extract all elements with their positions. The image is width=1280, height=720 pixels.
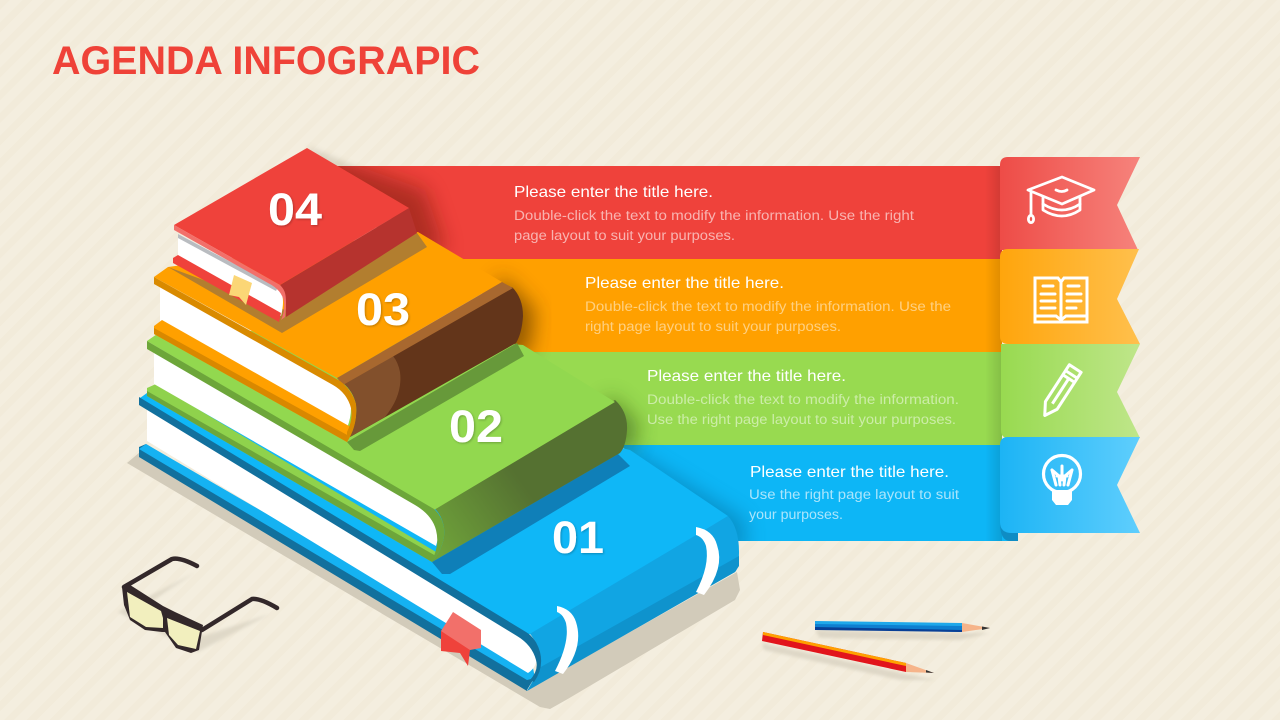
text block: green — [647, 368, 959, 427]
band: green — [520, 352, 1002, 445]
pages — [154, 353, 438, 546]
top cover — [174, 148, 409, 285]
spine ridge — [337, 282, 513, 385]
number 02: 02 — [449, 401, 503, 452]
pages — [160, 287, 351, 428]
icon: graduation cap — [1028, 177, 1094, 223]
cover edge — [139, 397, 541, 682]
text block: blue: Use the right page layout to suit — [749, 487, 959, 502]
glasses shadow — [118, 572, 270, 652]
icon: pencil — [1039, 365, 1081, 419]
text block: orange: Please enter the title here. — [585, 275, 784, 292]
number 03: 03 — [356, 284, 410, 335]
number 01: 01 — [552, 512, 604, 563]
lower cover — [154, 320, 352, 442]
cover edge — [154, 277, 356, 442]
text block: orange: right page layout to suit your purposes. — [585, 319, 841, 334]
shadow from orange book — [347, 343, 524, 451]
number labels — [268, 184, 604, 563]
lenses — [127, 592, 163, 628]
spine — [432, 400, 627, 562]
bookmark — [441, 612, 481, 666]
icon: open book — [1035, 278, 1087, 322]
lower cover — [173, 255, 281, 322]
band: red — [335, 166, 1002, 259]
cover edge — [174, 225, 286, 320]
top cover — [147, 330, 615, 510]
spine — [343, 287, 523, 437]
pages — [147, 410, 536, 673]
text block: red — [514, 184, 914, 243]
cover edge — [147, 341, 444, 562]
title: AGENDA INFOGRAPIC — [52, 39, 480, 83]
text block: blue: Please enter the title here. — [750, 464, 949, 481]
red book — [173, 148, 417, 322]
orange book — [154, 232, 523, 442]
band: orange — [460, 259, 1002, 352]
tab: orange — [1000, 249, 1140, 344]
glasses — [118, 559, 277, 653]
text block: green: Please enter the title here. — [647, 368, 846, 385]
icon: light bulb — [1044, 456, 1080, 505]
text block: blue: your purposes. — [749, 507, 843, 522]
band: blue — [620, 445, 1018, 541]
spine — [280, 208, 417, 317]
shadow from red book — [168, 233, 427, 333]
text block: red: Double-click the text to modify the information. Use the right — [514, 208, 914, 223]
text block: green: Double-click the text to modify the information. — [647, 392, 959, 407]
text block: orange — [585, 275, 951, 334]
text block: red: Please enter the title here. — [514, 184, 713, 201]
lower cover — [147, 384, 436, 562]
lower cover — [139, 444, 533, 691]
text block: blue — [749, 464, 959, 522]
pencil: red — [762, 632, 936, 680]
tab: blue — [1000, 437, 1140, 533]
spine bands — [555, 606, 578, 674]
green book — [147, 330, 627, 562]
fold under blue tab — [1000, 522, 1018, 541]
ribbon bands — [335, 166, 1018, 541]
shadows cast on bands — [280, 148, 1002, 560]
ground shadow of book stack — [127, 146, 740, 709]
top cover — [154, 232, 502, 378]
top cover — [140, 393, 728, 635]
pencil: blue — [815, 621, 990, 640]
tab: green — [1001, 344, 1140, 438]
shadow from green book — [432, 454, 630, 574]
text block: green: Use the right page layout to suit your purposes. — [647, 412, 956, 427]
bookmark — [229, 275, 252, 305]
text block: orange: Double-click the text to modify the information. Use the — [585, 299, 951, 314]
text block: red: page layout to suit your purposes. — [514, 228, 735, 243]
number 04: 04 — [268, 184, 322, 235]
ribbon tabs — [1000, 157, 1140, 541]
blue book — [139, 393, 739, 691]
frame — [122, 559, 277, 653]
spine — [527, 516, 739, 691]
pages — [178, 234, 283, 316]
tab: red — [1000, 157, 1140, 250]
